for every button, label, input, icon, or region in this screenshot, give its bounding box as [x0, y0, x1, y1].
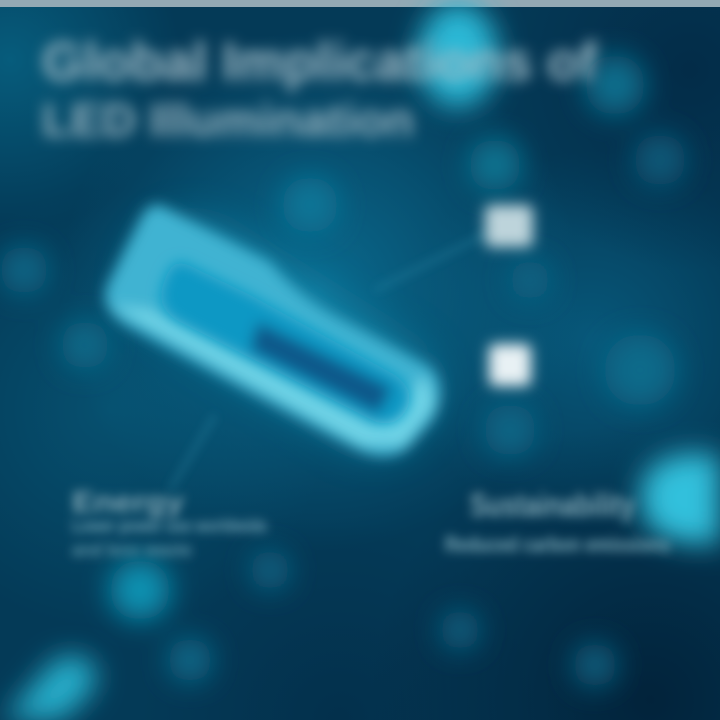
right caption: [445, 487, 670, 557]
left caption: and less waste: [72, 540, 192, 560]
tube inner channel: [161, 262, 410, 424]
lower white marker: [489, 344, 531, 386]
title: Global Implications of: [42, 32, 598, 92]
left caption: Lower power use worldwide: [72, 516, 267, 536]
right glowing capsule: [640, 453, 720, 545]
left caption: Energy: [72, 486, 184, 519]
left caption: [72, 486, 267, 560]
LED tube illustration: [105, 205, 443, 460]
bottom-left glowing capsule: [4, 656, 96, 720]
upper white marker: [485, 205, 533, 247]
title: LED Illumination: [42, 94, 414, 146]
right caption: Sustainability: [470, 487, 635, 523]
title: [42, 32, 598, 146]
connector lines: [170, 232, 490, 490]
top glowing orb: [418, 3, 498, 107]
tube outer body: [105, 205, 440, 456]
